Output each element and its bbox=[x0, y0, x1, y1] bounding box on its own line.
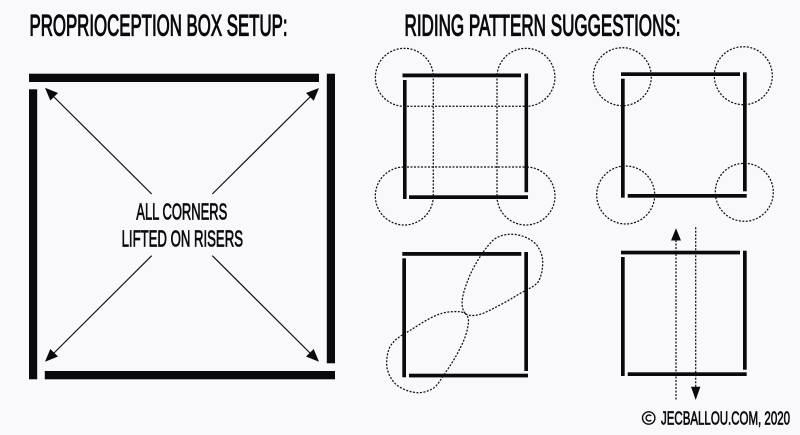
arrow: to top-left corner bbox=[45, 88, 152, 194]
box rails bbox=[621, 72, 747, 198]
panel: pattern 1, corner circles with connecting lines bbox=[375, 48, 555, 225]
box rails bbox=[29, 74, 335, 379]
heading: proprioception box setup: PROPRIOCEPTION BOX SETUP: bbox=[30, 10, 288, 43]
arrow: dotted upward bbox=[671, 228, 681, 400]
arrow: to bottom-right corner bbox=[212, 256, 319, 362]
panel: pattern 2, corner circles bbox=[593, 47, 773, 224]
dotted riding path bbox=[375, 48, 555, 225]
label: all corners lifted on risers: ALL CORNERS bbox=[136, 199, 227, 225]
label: all corners lifted on risers bbox=[122, 199, 243, 252]
dotted figure eight bbox=[387, 234, 543, 393]
arrow: to top-right corner bbox=[212, 88, 319, 194]
arrow: dotted downward bbox=[691, 227, 700, 400]
box rails bbox=[402, 74, 528, 199]
panel: pattern 4, straight lines in both directions bbox=[621, 227, 747, 400]
box rails bbox=[402, 252, 528, 377]
arrow: to bottom-left corner bbox=[45, 256, 152, 362]
icon: copyright sign bbox=[642, 412, 655, 424]
label: all corners lifted on risers: LIFTED ON RISERS bbox=[122, 226, 243, 252]
copyright bbox=[642, 408, 790, 428]
dotted circles bbox=[593, 47, 773, 224]
panel: large box setup bbox=[29, 74, 335, 379]
box rails bbox=[621, 251, 747, 376]
panel: pattern 3, diagonal figure eight bbox=[387, 234, 543, 393]
